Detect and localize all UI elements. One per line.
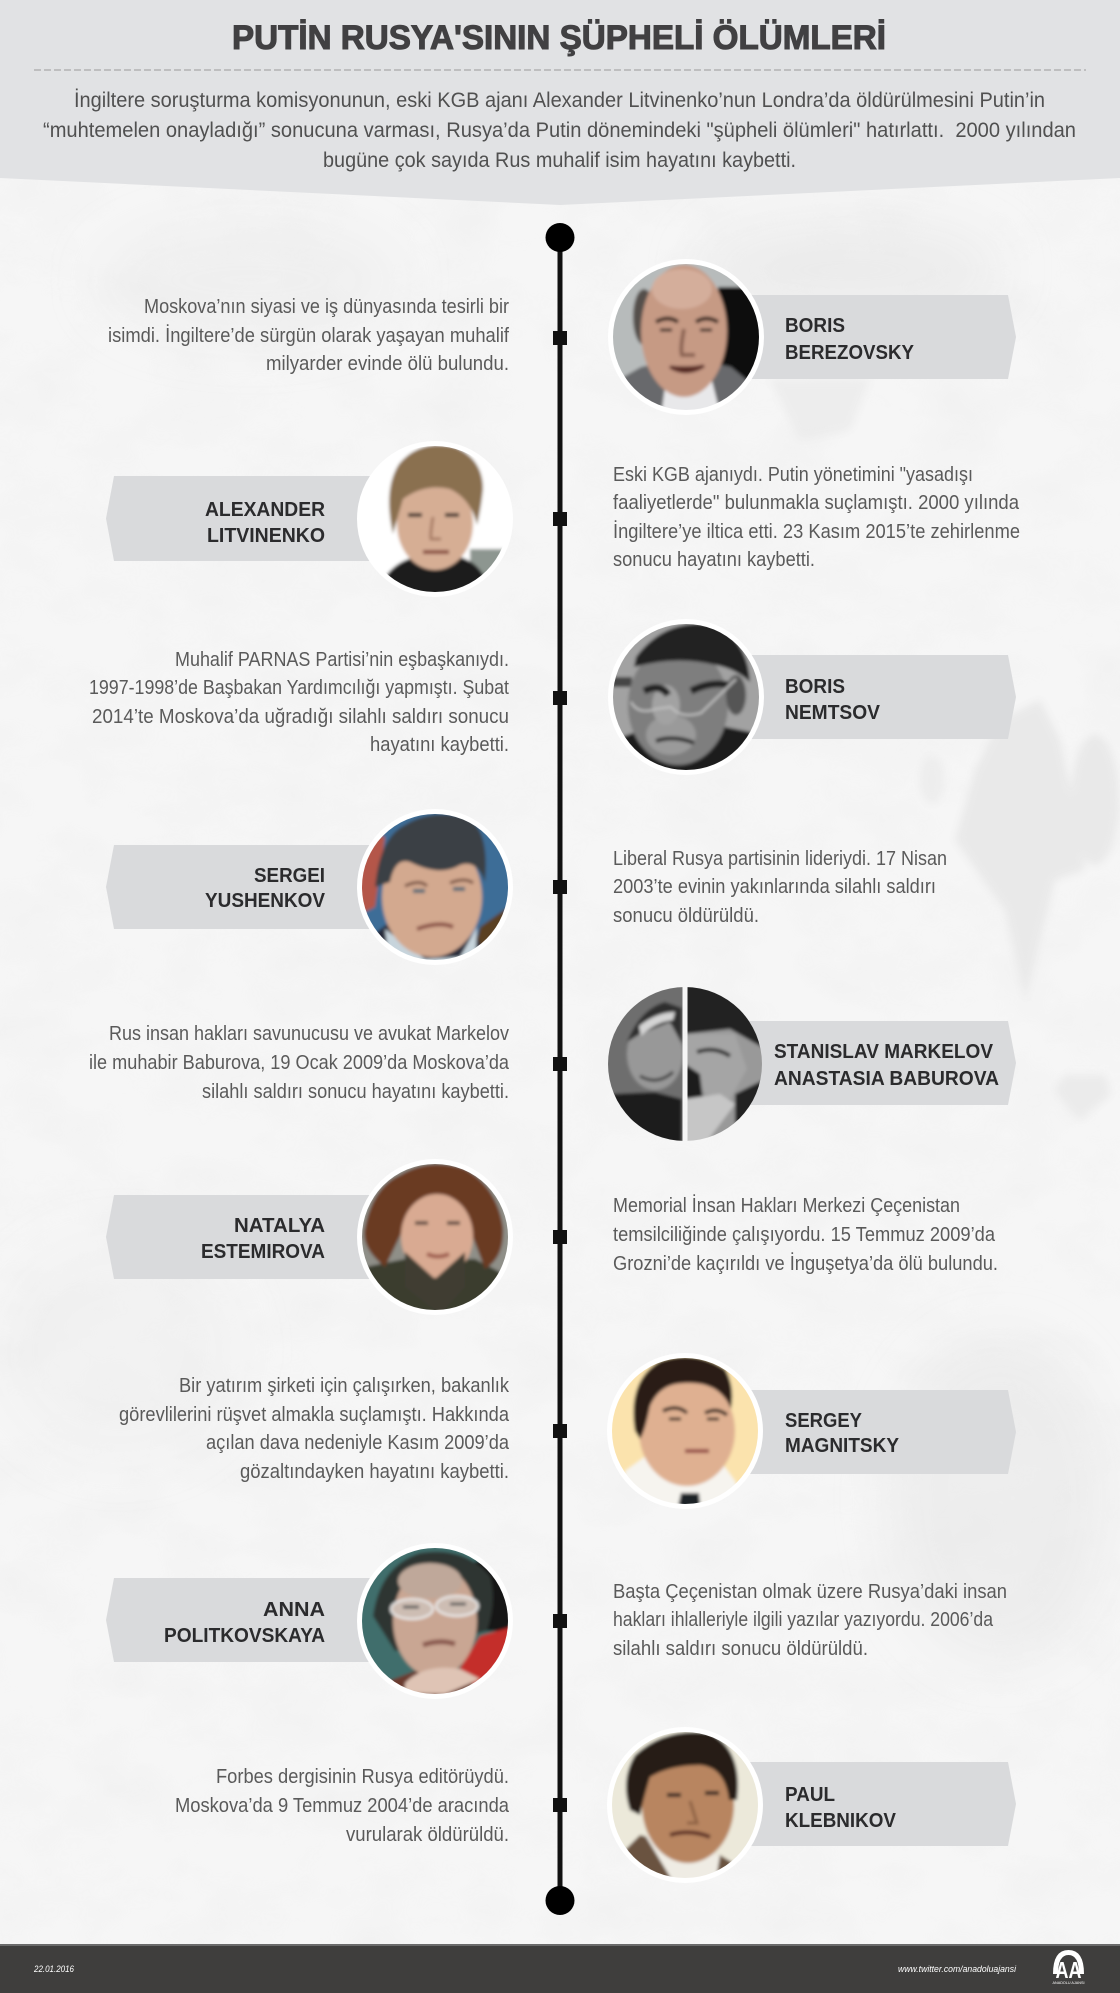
portrait bbox=[606, 257, 768, 417]
entry: Sergey Magnitsky bbox=[119, 1351, 1016, 1511]
description: Moskova’da 9 Temmuz 2004’de aracında bbox=[175, 1795, 510, 1817]
description: hakları ihlalleriyle ilgili yazılar yazıyordu. 2006’da bbox=[613, 1609, 994, 1631]
description: vurularak öldürüldü. bbox=[346, 1824, 509, 1846]
name banner bbox=[740, 1021, 1016, 1105]
description: 1997-1998’de Başbakan Yardımcılığı yapmıştı. Şubat bbox=[89, 677, 509, 699]
name banner: KLEBNIKOV bbox=[785, 1810, 897, 1832]
description bbox=[613, 1194, 998, 1275]
description: 2003’te evinin yakınlarında silahlı saldırı bbox=[613, 876, 936, 898]
description bbox=[89, 1023, 510, 1103]
name banner: BEREZOVSKY bbox=[785, 342, 915, 364]
name banner: NATALYA bbox=[234, 1215, 325, 1237]
name banner: SERGEY bbox=[785, 1410, 863, 1432]
description: sonucu hayatını kaybetti. bbox=[613, 549, 815, 571]
twitter address: www.twitter.com/anadoluajansi bbox=[898, 1964, 1017, 1975]
description: Başta Çeçenistan olmak üzere Rusya’daki insan bbox=[613, 1581, 1007, 1603]
description bbox=[613, 464, 1020, 571]
description bbox=[89, 649, 509, 756]
name banner: PAUL bbox=[785, 1784, 835, 1806]
description bbox=[613, 848, 947, 927]
description: silahlı saldırı sonucu öldürüldü. bbox=[613, 1638, 868, 1660]
portrait bbox=[355, 807, 515, 967]
name banner: ANASTASIA BABUROVA bbox=[774, 1068, 999, 1090]
name banner bbox=[106, 1195, 370, 1279]
entry: Natalya Estemirova bbox=[106, 1157, 998, 1317]
intro text: İngiltere soruşturma komisyonunun, eski KGB ajanı Alexander Litvinenko’nun Londra’da öldürülmesini Putin’in bbox=[74, 89, 1045, 112]
icon: Anadolu Agency logo: ANADOLU AJANSI bbox=[1052, 1980, 1084, 1985]
description: Rus insan hakları savunucusu ve avukat Markelov bbox=[109, 1023, 509, 1045]
portrait bbox=[605, 1351, 765, 1511]
portrait bbox=[355, 1541, 515, 1701]
name banner bbox=[740, 1762, 1016, 1846]
name banner: ANNA bbox=[263, 1599, 325, 1621]
date: 22.01.2016 bbox=[33, 1964, 75, 1975]
entry: Boris Nemtsov bbox=[89, 617, 1016, 777]
icon: Anadolu Agency logo bbox=[1052, 1950, 1084, 1985]
name banner: STANISLAV MARKELOV bbox=[774, 1041, 994, 1063]
description: açılan dava nedeniyle Kasım 2009’da bbox=[206, 1432, 510, 1454]
description: görevlilerini rüşvet almakla suçlamıştı. Hakkında bbox=[119, 1404, 510, 1426]
portrait bbox=[355, 439, 515, 599]
name banner: BORIS bbox=[785, 676, 845, 698]
portrait bbox=[355, 1157, 515, 1317]
entry: Anna Politkovskaya bbox=[106, 1541, 1007, 1701]
timeline bbox=[546, 223, 574, 1915]
name banner bbox=[106, 845, 370, 929]
description: silahlı saldırı sonucu hayatını kaybetti. bbox=[202, 1081, 509, 1103]
icon: Anadolu Agency logo: AA bbox=[1056, 1957, 1082, 1983]
description: Moskova’nın siyasi ve iş dünyasında tesirli bir bbox=[144, 296, 509, 318]
name banner: NEMTSOV bbox=[785, 702, 881, 724]
description: Grozni’de kaçırıldı ve İnguşetya’da ölü bulundu. bbox=[613, 1252, 998, 1275]
name banner bbox=[106, 1578, 370, 1662]
portrait bbox=[606, 617, 766, 777]
entry: Alexander Litvinenko bbox=[106, 439, 1020, 599]
title: PUTİN RUSYA'SININ ŞÜPHELİ ÖLÜMLERİ bbox=[232, 19, 886, 57]
description bbox=[119, 1375, 510, 1483]
portrait pair bbox=[605, 984, 765, 1144]
description: Muhalif PARNAS Partisi’nin eşbaşkanıydı. bbox=[175, 649, 509, 671]
description: temsilciliğinde çalışıyordu. 15 Temmuz 2009’da bbox=[613, 1224, 996, 1246]
name banner: ESTEMIROVA bbox=[201, 1241, 325, 1263]
description: Eski KGB ajanıydı. Putin yönetimini "yasadışı bbox=[613, 464, 973, 486]
description: Bir yatırım şirketi için çalışırken, bakanlık bbox=[179, 1375, 510, 1397]
intro text bbox=[43, 89, 1076, 172]
description bbox=[108, 296, 509, 375]
name banner: MAGNITSKY bbox=[785, 1435, 900, 1457]
entry: Sergei Yushenkov bbox=[106, 807, 947, 967]
name banner: LITVINENKO bbox=[207, 525, 325, 547]
description: Liberal Rusya partisinin lideriydi. 17 Nisan bbox=[613, 848, 947, 870]
name banner bbox=[106, 476, 370, 561]
intro text: “muhtemelen onayladığı” sonucuna varması, Rusya’da Putin dönemindeki "şüpheli ölümleri" hatırlattı. 2000 yılından bbox=[43, 119, 1076, 142]
description: ile muhabir Baburova, 19 Ocak 2009’da Moskova’da bbox=[89, 1052, 510, 1074]
description: sonucu öldürüldü. bbox=[613, 905, 759, 927]
intro text: bugüne çok sayıda Rus muhalif isim hayatını kaybetti. bbox=[323, 149, 796, 172]
entry: Paul Klebnikov bbox=[175, 1725, 1016, 1885]
name banner bbox=[740, 295, 1016, 379]
description: 2014’te Moskova’da uğradığı silahlı saldırı sonucu bbox=[92, 706, 509, 728]
description: isimdi. İngiltere’de sürgün olarak yaşayan muhalif bbox=[108, 324, 509, 347]
description: Forbes dergisinin Rusya editörüydü. bbox=[216, 1766, 509, 1788]
description: Memorial İnsan Hakları Merkezi Çeçenistan bbox=[613, 1194, 960, 1217]
name banner: SERGEI bbox=[254, 865, 325, 887]
name banner: YUSHENKOV bbox=[205, 890, 326, 912]
entry: Stanislav Markelov and Anastasia Baburova bbox=[89, 984, 1016, 1144]
footer bar bbox=[0, 1944, 1120, 1993]
header panel bbox=[0, 0, 1120, 205]
description: hayatını kaybetti. bbox=[370, 734, 509, 756]
name banner bbox=[740, 1390, 1016, 1474]
name banner: ALEXANDER bbox=[205, 499, 326, 521]
description: İngiltere’ye iltica etti. 23 Kasım 2015’te zehirlenme bbox=[613, 520, 1020, 543]
description: gözaltındayken hayatını kaybetti. bbox=[240, 1461, 509, 1483]
entry: Boris Berezovsky bbox=[108, 257, 1016, 417]
name banner: POLITKOVSKAYA bbox=[164, 1625, 325, 1647]
name banner bbox=[740, 655, 1016, 739]
name banner: BORIS bbox=[785, 315, 845, 337]
description bbox=[613, 1581, 1007, 1660]
description bbox=[175, 1766, 510, 1846]
description: milyarder evinde ölü bulundu. bbox=[266, 353, 509, 375]
description: faaliyetlerde" bulunmakla suçlamıştı. 2000 yılında bbox=[613, 492, 1020, 514]
portrait bbox=[605, 1725, 765, 1885]
